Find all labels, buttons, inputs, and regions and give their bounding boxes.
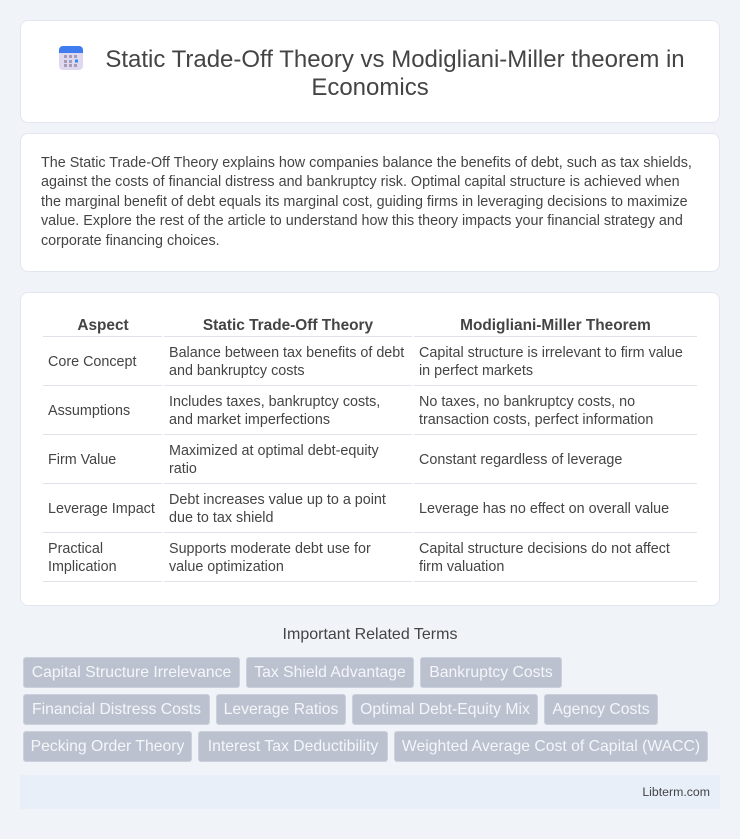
text block: introduction: against the costs of financial distress and bankruptcy risk. Optimal capital structure is achieved when bbox=[41, 174, 680, 190]
tag bbox=[216, 694, 346, 725]
cell: mm practical implication: Capital structure decisions do not affect bbox=[419, 541, 670, 557]
title bbox=[105, 46, 685, 101]
tag: Financial Distress Costs bbox=[32, 701, 201, 718]
cell: mm assumptions bbox=[419, 394, 653, 428]
text block: introduction bbox=[41, 154, 692, 249]
tag: Bankruptcy Costs bbox=[429, 664, 553, 681]
cell: static practical implication: Supports moderate debt use for bbox=[169, 541, 371, 557]
tag: Optimal Debt-Equity Mix bbox=[360, 701, 530, 718]
tag: Weighted Average Cost of Capital (WACC) bbox=[402, 738, 700, 755]
row: practical implication bbox=[48, 541, 117, 575]
heading: important related terms: Important Related Terms bbox=[283, 626, 457, 643]
tag bbox=[246, 657, 414, 688]
table header: modigliani-miller theorem: Modigliani-Miller Theorem bbox=[460, 317, 651, 334]
row: practical implication: Implication bbox=[48, 559, 117, 575]
text block: introduction: corporate financing choices. bbox=[41, 233, 220, 249]
tag bbox=[198, 731, 388, 762]
tag bbox=[544, 694, 658, 725]
cell: mm leverage impact: Leverage has no effect on overall value bbox=[419, 501, 669, 517]
cell: static firm value bbox=[169, 443, 379, 477]
cell: mm practical implication: firm valuation bbox=[419, 559, 504, 575]
panel: comparison table bbox=[20, 292, 720, 606]
cell: static core concept: Balance between tax benefits of debt bbox=[169, 345, 404, 361]
footer text: Libterm.com bbox=[642, 785, 710, 799]
panel: footer bbox=[20, 775, 720, 809]
tag: Pecking Order Theory bbox=[31, 738, 184, 755]
tag: Capital Structure Irrelevance bbox=[32, 664, 231, 681]
cell: mm core concept bbox=[419, 345, 683, 379]
text block: introduction: the marginal benefit of debt equals its marginal cost, guiding firms in leveraging decisions to maximize bbox=[41, 194, 688, 210]
cell: static assumptions: Includes taxes, bankruptcy costs, bbox=[169, 394, 380, 410]
tag bbox=[420, 657, 562, 688]
cell: static leverage impact: Debt increases value up to a point bbox=[169, 492, 386, 508]
cell: mm core concept: Capital structure is irrelevant to firm value bbox=[419, 345, 683, 361]
cell: static leverage impact bbox=[169, 492, 386, 526]
cell: mm assumptions: transaction costs, perfect information bbox=[419, 412, 653, 428]
tag: Tax Shield Advantage bbox=[254, 664, 406, 681]
tag group: related terms bbox=[23, 657, 708, 762]
tag: Interest Tax Deductibility bbox=[208, 738, 378, 755]
tag bbox=[23, 657, 240, 688]
cell: static core concept: and bankruptcy costs bbox=[169, 363, 305, 379]
cell: mm assumptions: No taxes, no bankruptcy costs, no bbox=[419, 394, 635, 410]
cell: mm practical implication bbox=[419, 541, 670, 575]
row: core concept: Core Concept bbox=[48, 354, 136, 370]
title: Static Trade-Off Theory vs Modigliani-Miller theorem in bbox=[105, 46, 685, 73]
panel: introduction bbox=[20, 133, 720, 272]
tag bbox=[352, 694, 538, 725]
tag bbox=[23, 731, 192, 762]
title: Economics bbox=[311, 74, 429, 101]
row: assumptions: Assumptions bbox=[48, 403, 130, 419]
tag: Agency Costs bbox=[552, 701, 650, 718]
panel: title card bbox=[20, 20, 720, 123]
row: firm value: Firm Value bbox=[48, 452, 116, 468]
cell: static firm value: ratio bbox=[169, 461, 197, 477]
tag bbox=[23, 694, 210, 725]
cell: mm firm value: Constant regardless of leverage bbox=[419, 452, 622, 468]
cell: static practical implication bbox=[169, 541, 371, 575]
icon: calendar bbox=[59, 46, 83, 70]
table header: aspect: Aspect bbox=[77, 317, 129, 334]
cell: static firm value: Maximized at optimal debt-equity bbox=[169, 443, 379, 459]
cell: static core concept bbox=[169, 345, 404, 379]
table header: static trade-off theory: Static Trade-Off Theory bbox=[203, 317, 373, 334]
text block: introduction: value. Explore the rest of the article to understand how this theory impacts your financial strategy and bbox=[41, 213, 683, 229]
row: leverage impact: Leverage Impact bbox=[48, 501, 155, 517]
cell: static assumptions bbox=[169, 394, 380, 428]
tag: Leverage Ratios bbox=[224, 701, 338, 718]
cell: static practical implication: value optimization bbox=[169, 559, 284, 575]
tag bbox=[394, 731, 708, 762]
cell: static assumptions: and market imperfections bbox=[169, 412, 330, 428]
cell: static leverage impact: due to tax shield bbox=[169, 510, 273, 526]
row: practical implication: Practical bbox=[48, 541, 103, 557]
text block: introduction: The Static Trade-Off Theory explains how companies balance the benefits of debt, such as tax shields, bbox=[41, 154, 692, 170]
cell: mm core concept: in perfect markets bbox=[419, 363, 533, 379]
